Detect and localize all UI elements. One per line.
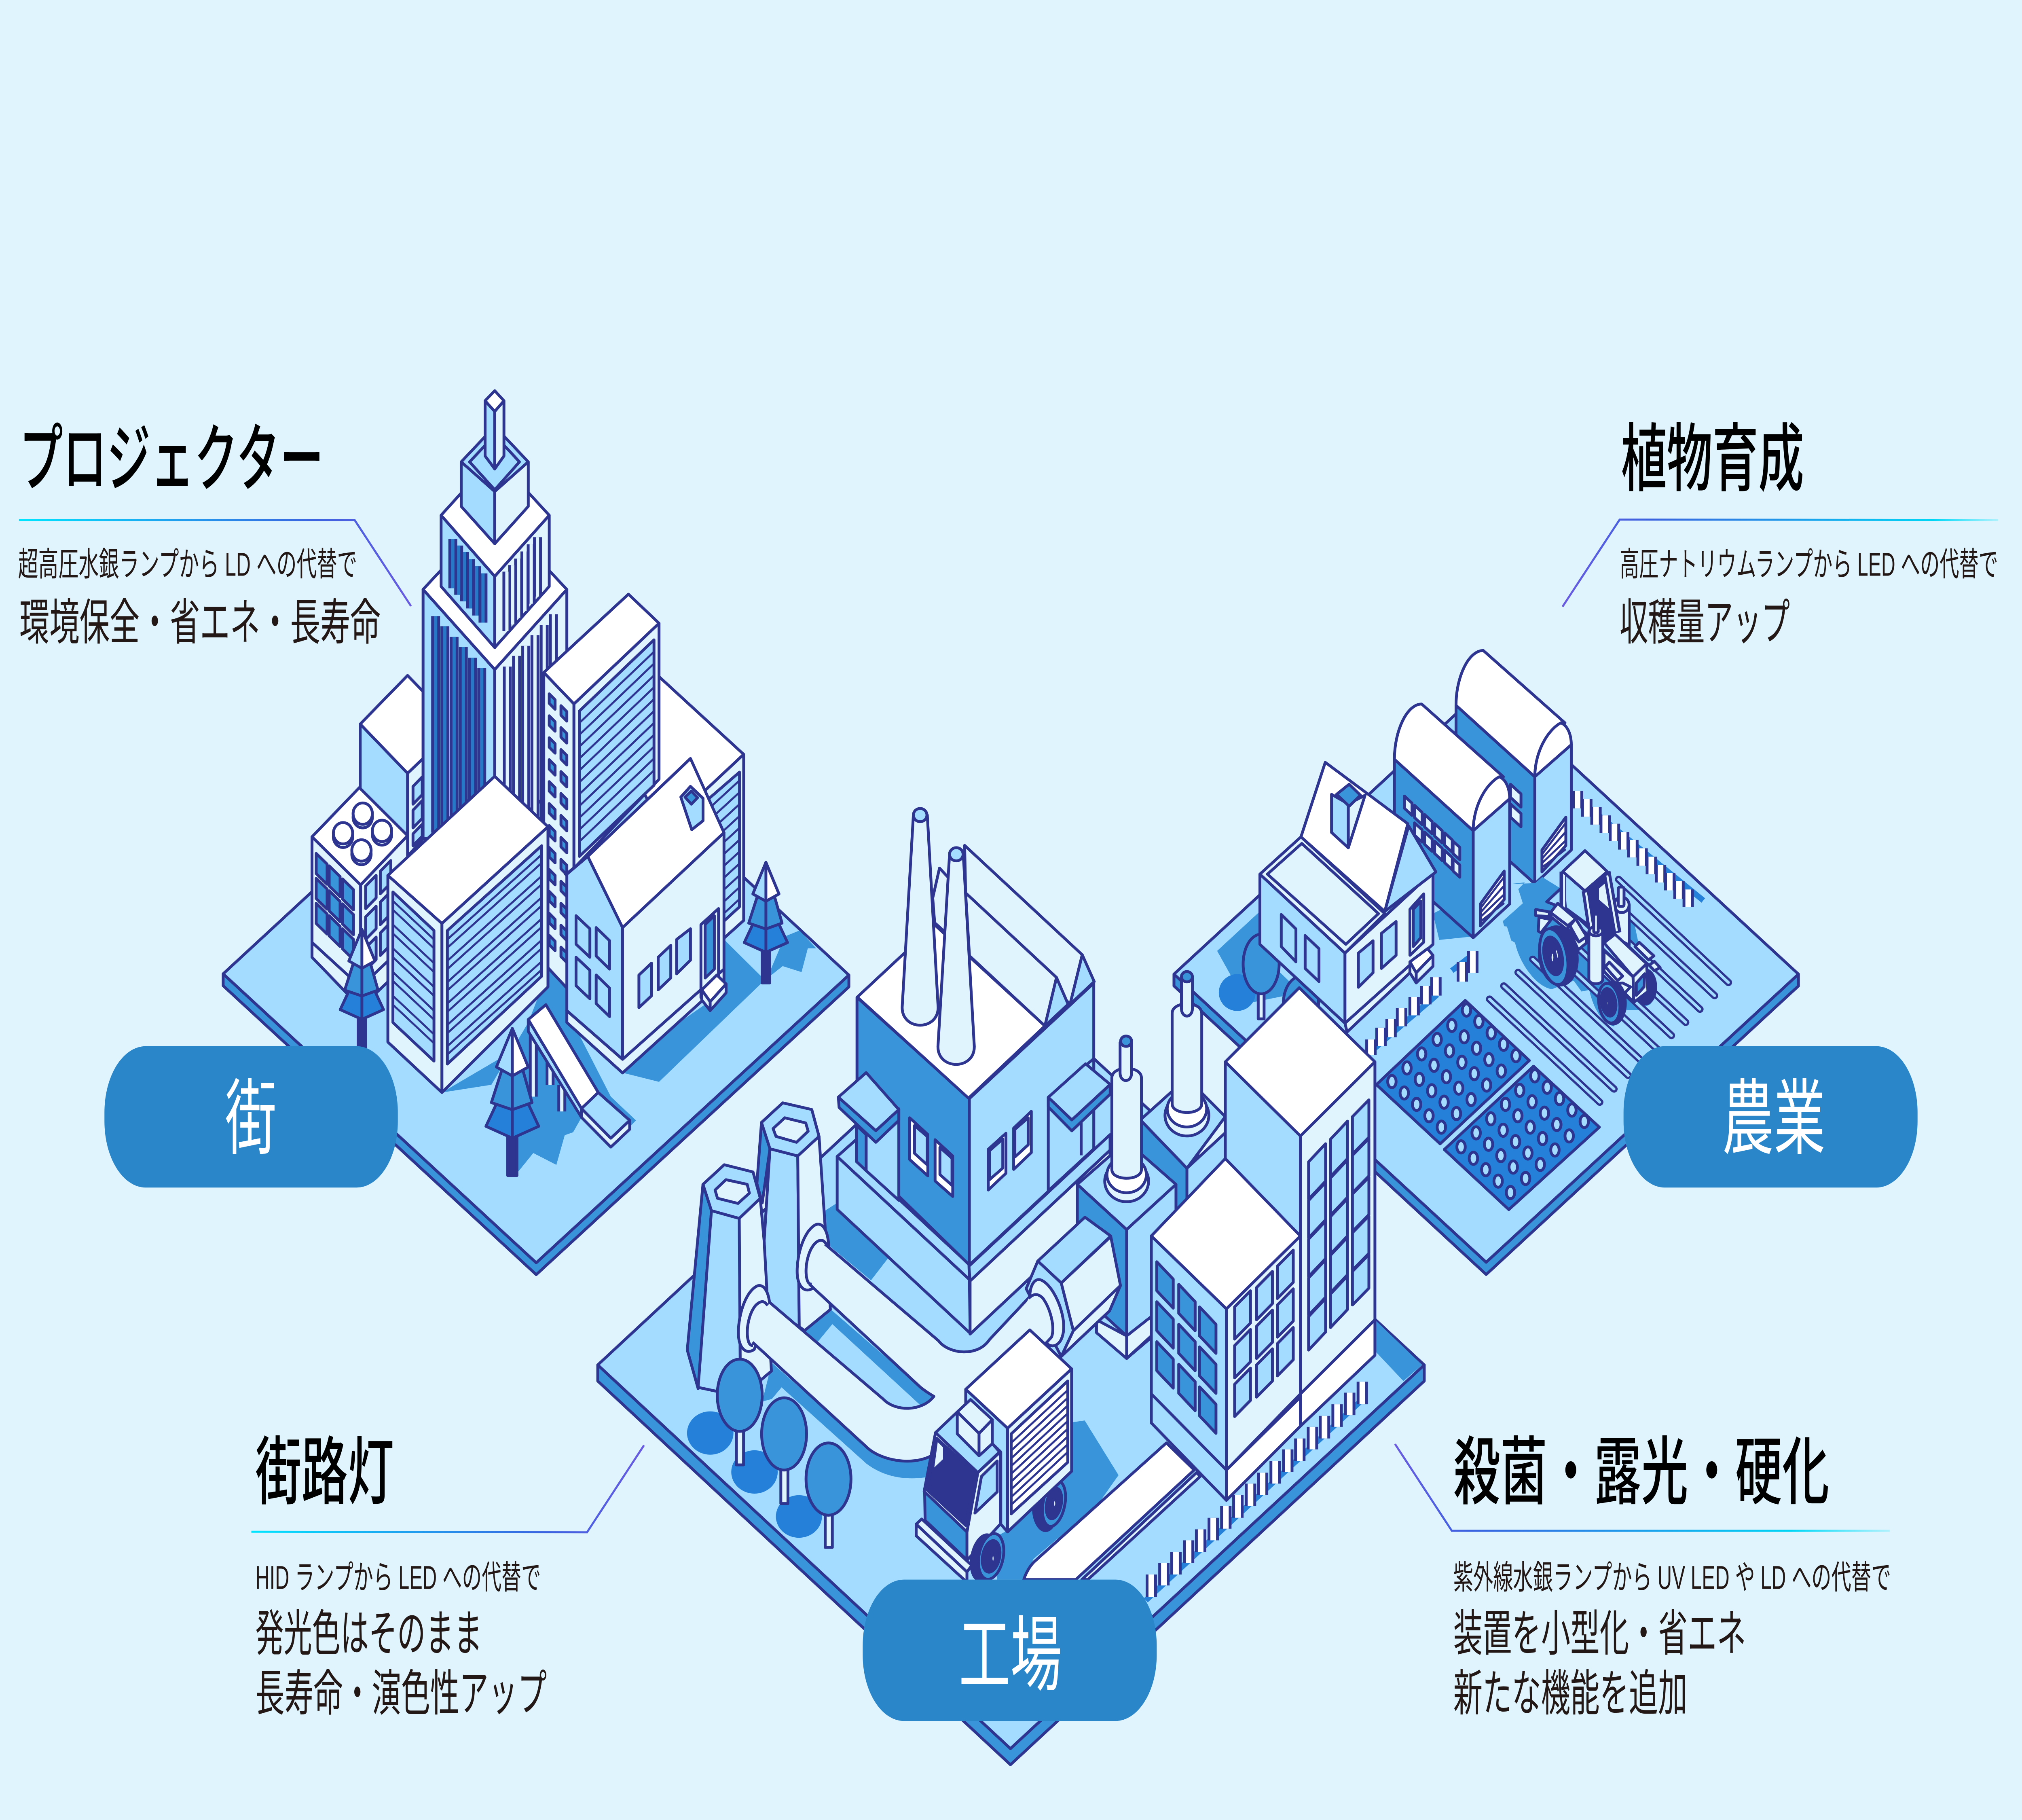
callout: 植物育成: 高圧ナトリウムランプから LED への代替で — [1620, 546, 1998, 583]
callout: 街路灯: 長寿命・演色性アップ — [255, 1666, 547, 1721]
panel: farm illustration — [1174, 650, 1798, 1274]
pill labels and text layer — [18, 418, 1998, 1721]
pipes — [738, 1224, 1052, 1461]
farm shadows — [1217, 874, 1510, 1003]
front large striped building — [388, 776, 548, 1092]
tractor shadow — [1503, 877, 1651, 1026]
back barn — [1456, 650, 1571, 884]
hexagonal stacks — [687, 1103, 830, 1397]
panel: city illustration — [223, 391, 849, 1275]
callout: 植物育成 — [1563, 418, 1998, 650]
callout: 殺菌・露光・硬化: 新たな機能を追加 — [1453, 1666, 1688, 1721]
callout: プロジェクター: プロジェクター — [19, 418, 324, 501]
callout: 殺菌・露光・硬化: 紫外線水銀ランプから UV LED や LD への代替で — [1453, 1559, 1891, 1596]
front barn — [1394, 704, 1510, 938]
farm trees — [1219, 934, 1319, 1031]
factory right awning — [1048, 1064, 1110, 1131]
callout: プロジェクター: 超高圧水銀ランプから LD への代替で — [18, 546, 357, 583]
back left building — [360, 675, 423, 856]
furrows — [1489, 879, 1728, 1102]
truck shadow and road — [997, 1420, 1200, 1580]
tall office building — [717, 988, 1375, 1600]
city platform — [223, 684, 849, 1275]
truck — [916, 1330, 1072, 1583]
callout: 街路灯: 発光色はそのまま — [255, 1606, 482, 1661]
bridge slide — [528, 1005, 630, 1147]
skyscraper — [423, 391, 567, 838]
factory roof and sawtooth — [857, 808, 1094, 1098]
panel: factory illustration — [598, 808, 1424, 1765]
small rooftop building — [312, 787, 408, 1007]
callout: 植物育成: 収穫量アップ — [1620, 595, 1790, 650]
front office building — [1151, 1159, 1301, 1500]
callout: 街路灯: HID ランプから LED への代替で — [255, 1559, 541, 1596]
factory platform — [598, 981, 1424, 1765]
factory windows and left entrance — [838, 1073, 1031, 1200]
pill: 工場 — [863, 1580, 1157, 1721]
trees — [340, 862, 787, 1176]
city ground shadows — [442, 931, 816, 1174]
callout: 殺菌・露光・硬化: 殺菌・露光・硬化 — [1453, 1431, 1829, 1514]
farmhouse — [1260, 762, 1436, 1032]
round trees — [717, 1359, 851, 1547]
factory base — [837, 1134, 1110, 1334]
pill: 農業: 農業 — [1722, 1073, 1825, 1165]
callout: プロジェクター: 環境保全・省エネ・長寿命 — [19, 595, 381, 650]
crop fields — [1377, 1001, 1599, 1210]
callout: 殺菌・露光・硬化 — [1395, 1431, 1891, 1721]
factory main building — [857, 983, 1094, 1265]
callout: 植物育成: 植物育成 — [1621, 418, 1804, 501]
pill: 農業 — [1624, 1046, 1918, 1187]
back right building — [621, 677, 744, 993]
pill: 街: 街 — [225, 1073, 277, 1165]
house — [565, 758, 726, 1073]
callout: 殺菌・露光・硬化: 装置を小型化・省エネ — [1453, 1606, 1746, 1661]
farm ground and buildings — [1174, 650, 1798, 1274]
mid striped building — [544, 594, 659, 996]
callout: 街路灯: 街路灯 — [255, 1431, 394, 1514]
hex pipe head — [1009, 1217, 1121, 1357]
tractor — [1535, 851, 1660, 1025]
pipe ground shadows — [687, 1203, 934, 1494]
factory fence — [1146, 1382, 1365, 1600]
back fence — [1571, 791, 1703, 907]
pill: 街 — [104, 1046, 398, 1187]
callout: プロジェクター — [18, 418, 411, 650]
chimney blocks — [1077, 971, 1225, 1359]
callout: 街路灯 — [251, 1431, 644, 1721]
front fence — [1368, 951, 1475, 1055]
pill: 工場: 工場 — [959, 1610, 1062, 1702]
farm platform — [1174, 686, 1798, 1274]
